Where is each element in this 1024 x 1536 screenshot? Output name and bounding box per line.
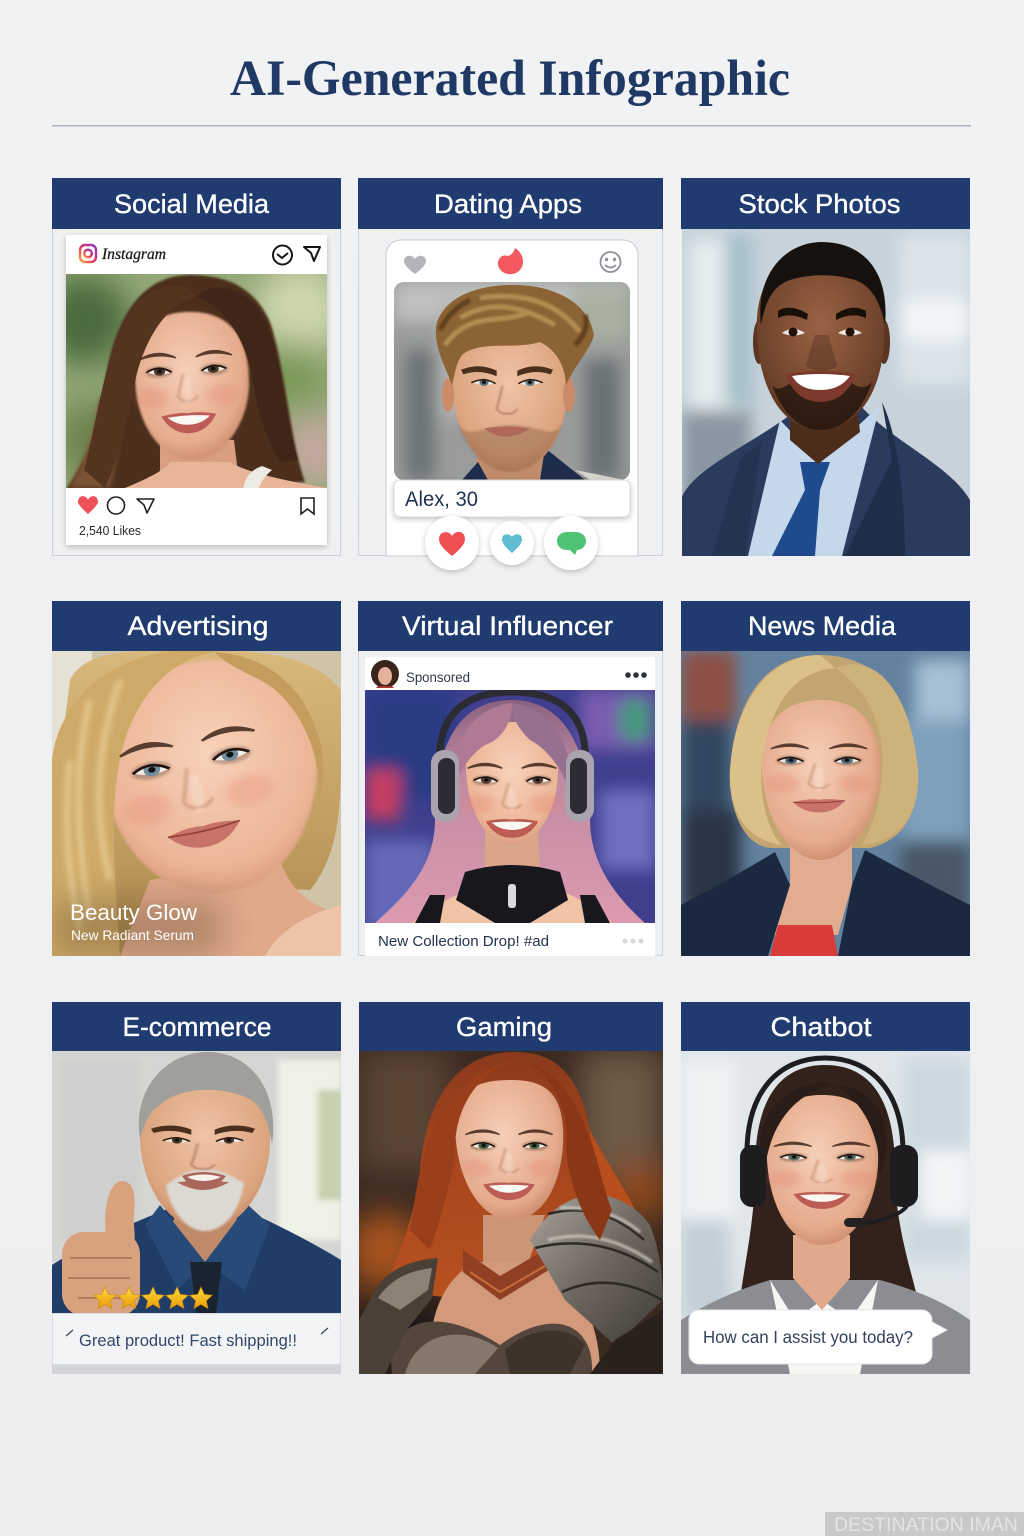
panel: Advertising [52, 601, 341, 956]
panel: E-commerce [52, 1002, 341, 1374]
icon: bookmark [301, 498, 314, 514]
speech bubble: How can I assist you today? [703, 1327, 913, 1347]
sponsored label: Sponsored [406, 669, 470, 685]
portrait: older man with thumbs up [52, 1051, 341, 1316]
speech bubble [689, 1310, 947, 1364]
avatar [371, 660, 399, 688]
portrait: blonde woman close-up [52, 650, 341, 956]
portrait: young woman with brown hair [66, 274, 327, 488]
portrait: pink-haired virtual woman [365, 690, 655, 930]
sponsored post card [365, 657, 655, 956]
heading: Chatbot: Chatbot [770, 1012, 872, 1042]
phone app card [386, 240, 638, 556]
watermark: DESTINATION IMAN [834, 1515, 1018, 1536]
hand thumbs up [62, 1181, 140, 1316]
icon: flame logo [498, 248, 523, 274]
icons: like, comment, share [78, 496, 154, 514]
heading: Social Media: Social Media [114, 189, 270, 219]
right pauldron [530, 1195, 663, 1345]
ad caption [70, 900, 197, 943]
icons: message and send [273, 246, 320, 264]
more dots [625, 672, 647, 678]
title: AI-Generated Infographic [230, 51, 790, 107]
Instagram post card [63, 234, 330, 550]
icon: grey heart [404, 256, 426, 274]
panel: News Media [681, 601, 970, 956]
caption dots [622, 938, 644, 944]
panel: Stock Photos [681, 178, 970, 556]
portrait: customer service agent with headset [681, 1051, 970, 1374]
Instagram wordmark: Instagram [101, 246, 166, 263]
portrait: red-haired armored warrior [347, 1051, 670, 1374]
star rating [94, 1287, 212, 1309]
panel: Virtual Influencer [358, 601, 663, 956]
heading: Advertising: Advertising [128, 611, 268, 641]
panel: Chatbot [681, 1002, 970, 1374]
panel: Social Media [40, 178, 350, 556]
ad caption: New Radiant Serum [71, 927, 194, 943]
review caption: Great product! Fast shipping!! [79, 1331, 297, 1350]
ad caption: Beauty Glow [70, 900, 197, 925]
left pauldron [359, 1258, 438, 1374]
heading: Gaming: Gaming [456, 1012, 552, 1042]
action buttons [425, 516, 598, 570]
heading: E-commerce: E-commerce [122, 1012, 272, 1042]
review caption [52, 1313, 341, 1374]
heading: Dating Apps: Dating Apps [434, 189, 582, 219]
panel: Gaming [347, 1002, 670, 1374]
name bar [394, 480, 630, 517]
portrait: news anchor [681, 651, 970, 956]
chest armor [391, 1321, 592, 1374]
name label: Alex, 30 [405, 488, 478, 511]
heading: Virtual Influencer: Virtual Influencer [402, 611, 613, 641]
portrait: man with wavy hair [394, 282, 630, 480]
icon: Instagram logo [80, 245, 96, 262]
caption: New Collection Drop! #ad [378, 933, 549, 950]
portrait: smiling businessman [681, 229, 970, 556]
likes count: 2,540 Likes [79, 523, 141, 538]
panel: Dating Apps [358, 178, 663, 570]
heading: News Media: News Media [748, 611, 897, 641]
icon: smiley [600, 252, 620, 272]
heading: Stock Photos: Stock Photos [738, 189, 900, 219]
